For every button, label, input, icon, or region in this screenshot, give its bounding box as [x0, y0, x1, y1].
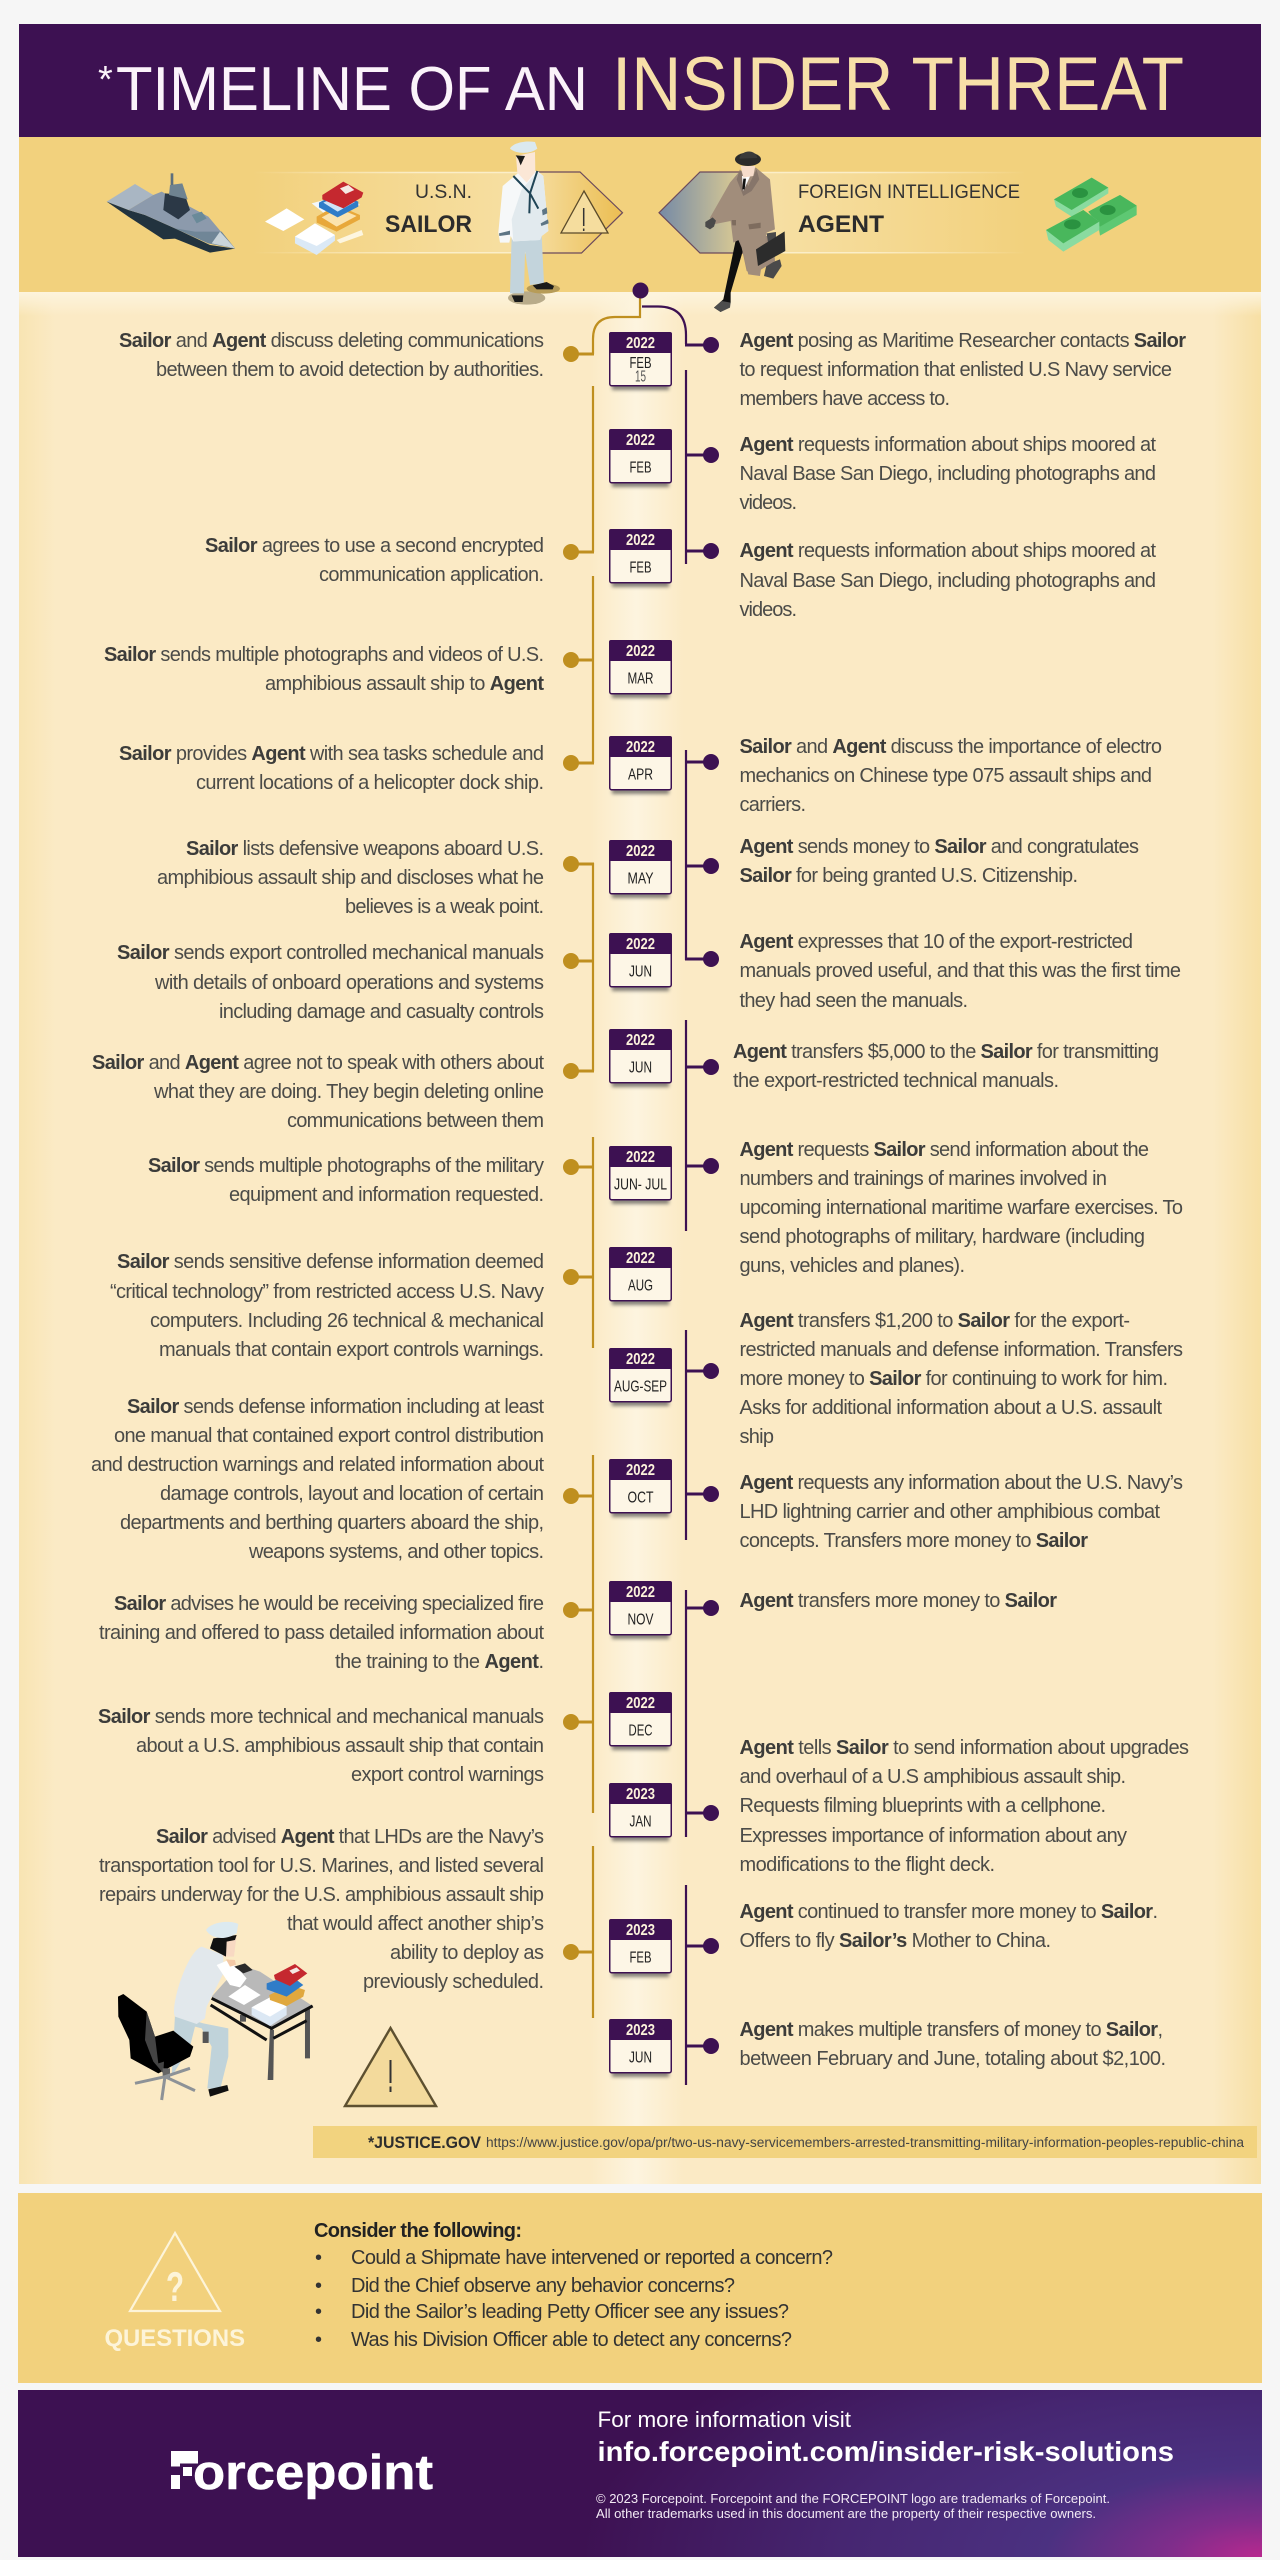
- sailor text: agree not to speak: [92, 1052, 544, 1132]
- agent text: mother to China: Offers to fly Sailor’s Mother to China.: [740, 1930, 1051, 1952]
- date card: Feb 15 2022: 15: [635, 368, 646, 386]
- icon: warning triangle large: [345, 2028, 436, 2106]
- date card: Feb 2023: FEB: [630, 1950, 652, 1966]
- sailor text: more manuals: about a U.S. amphibious assault ship that contain: [136, 1735, 544, 1757]
- sailor text: more manuals: Sailor sends more technical and mechanical manuals: [98, 1706, 544, 1728]
- date card: Nov 2022: [609, 1581, 672, 1639]
- purple dots: [632, 282, 719, 2054]
- agent text: posing as researcher: Agent posing as Maritime Researcher contacts Sailor: [740, 330, 1186, 352]
- agent text: ships moored: Agent requests information about ships moored at: [740, 434, 1156, 456]
- date card: Jun 2023: [609, 2019, 672, 2077]
- date card: Jun-Jul 2022: [609, 1146, 672, 1204]
- date card: Jun 2022: 2022: [626, 936, 655, 953]
- agent text: electro mechanics: mechanics on Chinese type 075 assault ships and: [740, 765, 1152, 787]
- panel: questions: [18, 2193, 1262, 2383]
- date card: Jun-Jul 2022: 2022: [626, 1149, 655, 1166]
- agent text: mother to China: Agent continued to transfer more money to Sailor.: [740, 1901, 1158, 1923]
- agent text: marine exercises: upcoming international maritime warfare exercises. To: [740, 1197, 1183, 1219]
- date card: Mar 2022: [609, 640, 672, 698]
- sailor text: military equipment: equipment and information requested.: [229, 1184, 544, 1206]
- date card: Apr 2022: 2022: [626, 739, 655, 756]
- agent text: posing as researcher: members have access to.: [740, 388, 950, 410]
- label: foreign intelligence: FOREIGN INTELLIGENCE: [798, 182, 1020, 203]
- agent text: transfers 1200: [740, 1310, 1183, 1448]
- agent text: marine exercises: [740, 1139, 1183, 1277]
- date card: Aug 2022: AUG: [628, 1278, 653, 1294]
- sailor text: more manuals: [98, 1706, 544, 1786]
- sailor text: defensive weapons: believes is a weak point.: [345, 896, 544, 918]
- agent text: ships moored repeat: Agent requests information about ships moored at: [740, 540, 1156, 562]
- sailor text: fire training: [99, 1593, 544, 1673]
- date card: May 2022: MAY: [628, 870, 654, 888]
- date card: Apr 2022: [609, 736, 672, 794]
- agent text: transfers 5000: Agent transfers $5,000 to the Sailor for transmitting: [733, 1041, 1159, 1063]
- agent text: upgrades and overhaul: modifications to the flight deck.: [740, 1854, 995, 1876]
- sailor text: multiple photographs: Sailor sends multiple photographs and videos of U.S.: [104, 644, 544, 666]
- date card: Feb 2022: FEB: [630, 560, 652, 576]
- date card: Feb 15 2022: 2022: [626, 335, 655, 352]
- gold line: sailor: [578, 291, 640, 2018]
- agent text: ships moored repeat: Naval Base San Diego, including photographs and: [740, 570, 1156, 592]
- date card: May 2022: 2022: [626, 843, 655, 860]
- agent text: posing as researcher: [740, 330, 1186, 410]
- date card: Jun 2022: JUN: [629, 1060, 652, 1076]
- agent text: transfers 5000: [733, 1041, 1159, 1092]
- questions list: Did the Chief observe any behavior concerns?: [351, 2275, 735, 2297]
- header panel: sailor and agent: [19, 137, 1261, 292]
- sailor text: defense information: one manual that contained export control distribution: [114, 1425, 544, 1447]
- sailor text: export manuals: with details of onboard operations and systems: [154, 972, 544, 994]
- date card: May 2022: [609, 840, 672, 898]
- agent text: more money: Agent transfers more money to Sailor: [740, 1590, 1057, 1612]
- sailor text: defense information: and destruction warnings and related information about: [91, 1454, 544, 1476]
- date card: Mar 2022: 2022: [626, 643, 655, 660]
- agent text: manuals useful: manuals proved useful, and that this was the first time: [740, 960, 1181, 982]
- sailor text: LHD repairs: previously scheduled.: [363, 1971, 544, 1993]
- sailor text: defense information: Sailor sends defense information including at least: [127, 1396, 544, 1418]
- date card: Aug 2022: 2022: [626, 1250, 655, 1267]
- date card: Aug-Sep 2022: 2022: [626, 1351, 655, 1368]
- sailor text: encrypted application: [205, 535, 544, 586]
- agent text: congratulates: [740, 836, 1139, 887]
- sailor text: export manuals: [117, 942, 544, 1023]
- date card: Jan 2023: [609, 1783, 672, 1841]
- date card: Apr 2022: APR: [628, 766, 653, 784]
- label: agent: AGENT: [798, 211, 884, 238]
- agent text: mother to China: [740, 1901, 1158, 1952]
- sailor text: defensive weapons: Sailor lists defensive weapons aboard U.S.: [186, 838, 544, 860]
- sailor text: encrypted application: Sailor agrees to use a second encrypted: [205, 535, 544, 557]
- agent text: transfers 1200: more money to Sailor for continuing to work for him.: [740, 1368, 1168, 1390]
- agent text: upgrades and overhaul: [740, 1737, 1189, 1876]
- agent text: ships moored: Naval Base San Diego, including photographs and: [740, 463, 1156, 485]
- agent text: congratulates: Agent sends money to Sailor and congratulates: [740, 836, 1139, 858]
- sailor text: more manuals: export control warnings: [351, 1764, 544, 1786]
- gold dots: [563, 346, 579, 1960]
- sailor text: critical technology: manuals that contain export controls warnings.: [159, 1339, 544, 1361]
- agent text: manuals useful: they had seen the manuals.: [740, 990, 968, 1012]
- sailor text: export manuals: Sailor sends export controlled mechanical manuals: [117, 942, 544, 964]
- sailor text: fire training: Sailor advises he would be receiving specialized fire: [114, 1593, 544, 1615]
- agent text: upgrades and overhaul: Agent tells Sailor to send information about upgrades: [740, 1737, 1189, 1759]
- label: sailor: SAILOR: [385, 211, 472, 238]
- sailor text: military equipment: Sailor sends multiple photographs of the military: [148, 1155, 544, 1177]
- questions list: •: [315, 2301, 322, 2323]
- date card: Aug-Sep 2022: AUG-SEP: [614, 1378, 667, 1396]
- sailor text: multiple photographs: amphibious assault ship to Agent: [265, 673, 544, 695]
- agent text: transfers 1200: restricted manuals and defense information. Transfers: [740, 1339, 1183, 1361]
- sailor text: critical technology: Sailor sends sensitive defense information deemed: [117, 1251, 544, 1273]
- sailor text: encrypted application: communication application.: [319, 564, 544, 586]
- date card: Dec 2022: DEC: [628, 1722, 652, 1740]
- date card: Aug 2022: [609, 1247, 672, 1305]
- date card: Mar 2022: MAR: [628, 670, 654, 688]
- date card: Nov 2022: NOV: [628, 1612, 654, 1628]
- date card: Feb 15 2022: [609, 332, 672, 390]
- date card: Feb 2023: [609, 1919, 672, 1977]
- agent text: manuals useful: [740, 931, 1181, 1012]
- agent text: marine exercises: send photographs of military, hardware (including: [740, 1226, 1145, 1248]
- questions list: •: [315, 2275, 322, 2297]
- timeline connectors and lines: [578, 291, 704, 2085]
- icon: question triangle: ?: [166, 2263, 184, 2310]
- date card: Jun-Jul 2022: JUN- JUL: [614, 1176, 667, 1194]
- source footnote: [313, 2126, 1257, 2158]
- icon: warship: [107, 173, 235, 253]
- sailor text: LHD repairs: repairs underway for the U.S. amphibious assault ship: [99, 1884, 544, 1906]
- banner: agent: [659, 172, 1026, 253]
- title: timeline of an: TIMELINE OF AN: [116, 55, 588, 124]
- icon: money stacks: [1046, 178, 1137, 252]
- agent text: transfers 1200: ship: [740, 1426, 774, 1448]
- sailor text: LHD repairs: ability to deploy as: [390, 1942, 544, 1964]
- source label: *JUSTICE.GOV: [368, 2133, 482, 2152]
- date card: Aug-Sep 2022: [609, 1348, 672, 1406]
- agent text: posing as researcher: to request information that enlisted U.S Navy service: [740, 359, 1172, 381]
- title: insider threat: INSIDER THREAT: [612, 42, 1184, 127]
- date card: Jan 2023: 2023: [626, 1786, 655, 1803]
- questions list: •: [315, 2329, 322, 2351]
- sailor text: deleting communications: between them to avoid detection by authorities.: [156, 359, 544, 381]
- icon: question triangle: [130, 2233, 220, 2311]
- copyright: © 2023 Forcepoint. Forcepoint and the FORCEPOINT logo are trademarks of Forcepoint.: [596, 2491, 1110, 2506]
- agent text: marine exercises: Agent requests Sailor send information about the: [740, 1139, 1149, 1161]
- agent text: marine exercises: guns, vehicles and planes).: [740, 1255, 965, 1277]
- agent text: transfers 1200: Asks for additional information about a U.S. assault: [740, 1397, 1162, 1419]
- questions list: •: [315, 2247, 322, 2269]
- questions list: Could a Shipmate have intervened or reported a concern?: [351, 2247, 833, 2269]
- sailor text: defensive weapons: [157, 838, 544, 918]
- date card: Jun 2022: JUN: [629, 964, 652, 980]
- date card: Feb 2022: FEB: [630, 460, 652, 476]
- date card: Oct 2022: 2022: [626, 1462, 655, 1479]
- copyright: All other trademarks used in this document are the property of their respective owners.: [596, 2506, 1096, 2521]
- date card: Oct 2022: [609, 1459, 672, 1517]
- date card: Dec 2022: 2022: [626, 1695, 655, 1712]
- date card: Feb 2022: [609, 429, 672, 487]
- sailor text: LHD repairs: transportation tool for U.S. Marines, and listed several: [99, 1855, 544, 1877]
- agent text: congratulates: Sailor for being granted U.S. Citizenship.: [740, 865, 1078, 887]
- sailor text: fire training: training and offered to pass detailed information about: [99, 1622, 544, 1644]
- logo: Forcepoint: orcepoint: [193, 2446, 433, 2500]
- sailor text: military equipment: [148, 1155, 544, 1206]
- agent text: transfers 1200: Agent transfers $1,200 to Sailor for the export-: [740, 1310, 1130, 1332]
- sailor text: defense information: weapons systems, and other topics.: [248, 1541, 544, 1563]
- sailor text: LHD repairs: that would affect another ship’s: [287, 1913, 544, 1935]
- icon: warning triangle: [561, 191, 608, 233]
- date card: Jun 2022: 2022: [626, 1032, 655, 1049]
- agent text: upgrades and overhaul: Expresses importance of information about any: [740, 1825, 1127, 1847]
- agent text: ships moored: videos.: [740, 492, 797, 514]
- copyright: [596, 2491, 1110, 2521]
- date card: Feb 2023: 2023: [626, 1922, 655, 1939]
- agent text: LHD lightning: concepts. Transfers more money to Sailor: [740, 1530, 1088, 1552]
- questions heading: Consider the following:: [314, 2220, 522, 2242]
- sailor text: deleting communications: Sailor and Agent discuss deleting communications: [119, 330, 544, 352]
- timeline dots: [563, 282, 719, 2054]
- figure: sailor: [498, 141, 560, 305]
- sailor text: agree not to speak: what they are doing. They begin deleting online: [153, 1081, 544, 1103]
- questions list: Was his Division Officer able to detect any concerns?: [351, 2329, 792, 2351]
- agent text: LHD lightning: [740, 1472, 1183, 1552]
- date card: Jun 2022: [609, 933, 672, 991]
- questions list: Did the Sailor’s leading Petty Officer see any issues?: [351, 2301, 789, 2323]
- agent text: ships moored: [740, 434, 1156, 514]
- date card: Feb 2022: 2022: [626, 532, 655, 549]
- date card: Jun 2022: [609, 1029, 672, 1087]
- footer heading: For more information visit: [598, 2407, 851, 2432]
- agent text: marine exercises: numbers and trainings of marines involved in: [740, 1168, 1107, 1190]
- icon: sailor at desk: [118, 1922, 313, 2100]
- date card: Feb 15 2022: FEB: [630, 355, 652, 372]
- sailor text: deleting communications: [119, 330, 544, 381]
- agent text: transfers 5000: the export-restricted technical manuals.: [733, 1070, 1059, 1092]
- source url: https://www.justice.gov/opa/pr/two-us-navy-servicemembers-arrested-transmitting-military-information-peoples-republic-china: [486, 2135, 1244, 2150]
- agent text: multiple transfers: [740, 2019, 1166, 2070]
- sailor text: critical technology: computers. Including 26 technical & mechanical: [150, 1310, 544, 1332]
- title: timeline of an: *: [98, 59, 113, 101]
- logo: Forcepoint: F: [171, 2442, 197, 2501]
- agent text: electro mechanics: [740, 736, 1162, 816]
- sailor text: export manuals: including damage and casualty controls: [219, 1001, 544, 1023]
- sailor text: agree not to speak: Sailor and Agent agree not to speak with others about: [92, 1052, 544, 1074]
- date card: Nov 2022: 2022: [626, 1584, 655, 1601]
- date card: Feb 2022: 2022: [626, 432, 655, 449]
- date card: Jun 2023: JUN: [629, 2050, 652, 2066]
- panel: footer: [18, 2390, 1262, 2557]
- date card: Jan 2023: JAN: [630, 1814, 652, 1830]
- agent text: LHD lightning: Agent requests any information about the U.S. Navy’s: [740, 1472, 1183, 1494]
- sailor text: defensive weapons: amphibious assault ship and discloses what he: [157, 867, 544, 889]
- sailor text: sea tasks: [119, 743, 544, 794]
- sailor text: multiple photographs: [104, 644, 544, 695]
- agent text: upgrades and overhaul: Requests filming blueprints with a cellphone.: [740, 1795, 1106, 1817]
- sailor text: critical technology: [110, 1251, 544, 1361]
- agent text: upgrades and overhaul: and overhaul of a U.S amphibious assault ship.: [740, 1766, 1126, 1788]
- sailor text: LHD repairs: [99, 1826, 544, 1993]
- sailor text: sea tasks: Sailor provides Agent with sea tasks schedule and: [119, 743, 544, 765]
- icon: books and papers: [265, 182, 363, 255]
- agent text: manuals useful: Agent expresses that 10 of the export-restricted: [740, 931, 1133, 953]
- banner: sailor: [253, 172, 622, 253]
- agent text: multiple transfers: Agent makes multiple transfers of money to Sailor,: [740, 2019, 1163, 2041]
- date card: Feb 2022: [609, 529, 672, 587]
- sailor text: critical technology: “critical technology” from restricted access U.S. Navy: [110, 1281, 544, 1303]
- agent text: ships moored repeat: videos.: [740, 599, 797, 621]
- date card: Dec 2022: [609, 1692, 672, 1750]
- sailor text: fire training: the training to the Agent.: [335, 1651, 544, 1673]
- panel: timeline background: [19, 292, 1261, 2184]
- sailor text: defense information: damage controls, layout and location of certain: [160, 1483, 544, 1505]
- label: questions: QUESTIONS: [104, 2325, 245, 2352]
- figure: agent: [705, 151, 785, 312]
- sailor text: defense information: [91, 1396, 544, 1563]
- date card: Oct 2022: OCT: [628, 1490, 654, 1506]
- agent text: ships moored repeat: [740, 540, 1156, 621]
- date card: Jun 2023: 2023: [626, 2022, 655, 2039]
- sailor text: agree not to speak: communications between them: [287, 1110, 544, 1132]
- title band: [19, 24, 1261, 137]
- purple line: agent: [642, 306, 704, 2085]
- footer url: info.forcepoint.com/insider-risk-solutions: [598, 2436, 1174, 2467]
- agent text: multiple transfers: between February and June, totaling about $2,100.: [740, 2048, 1166, 2070]
- agent text: electro mechanics: Sailor and Agent discuss the importance of electro: [740, 736, 1162, 758]
- agent text: electro mechanics: carriers.: [740, 794, 806, 816]
- label: usn: U.S.N.: [415, 182, 472, 203]
- sailor text: sea tasks: current locations of a helicopter dock ship.: [196, 772, 544, 794]
- agent text: LHD lightning: LHD lightning carrier and other amphibious combat: [740, 1501, 1160, 1523]
- sailor text: LHD repairs: Sailor advised Agent that LHDs are the Navy’s: [156, 1826, 544, 1848]
- questions list: [315, 2247, 833, 2351]
- sailor text: defense information: departments and berthing quarters aboard the ship,: [120, 1512, 544, 1534]
